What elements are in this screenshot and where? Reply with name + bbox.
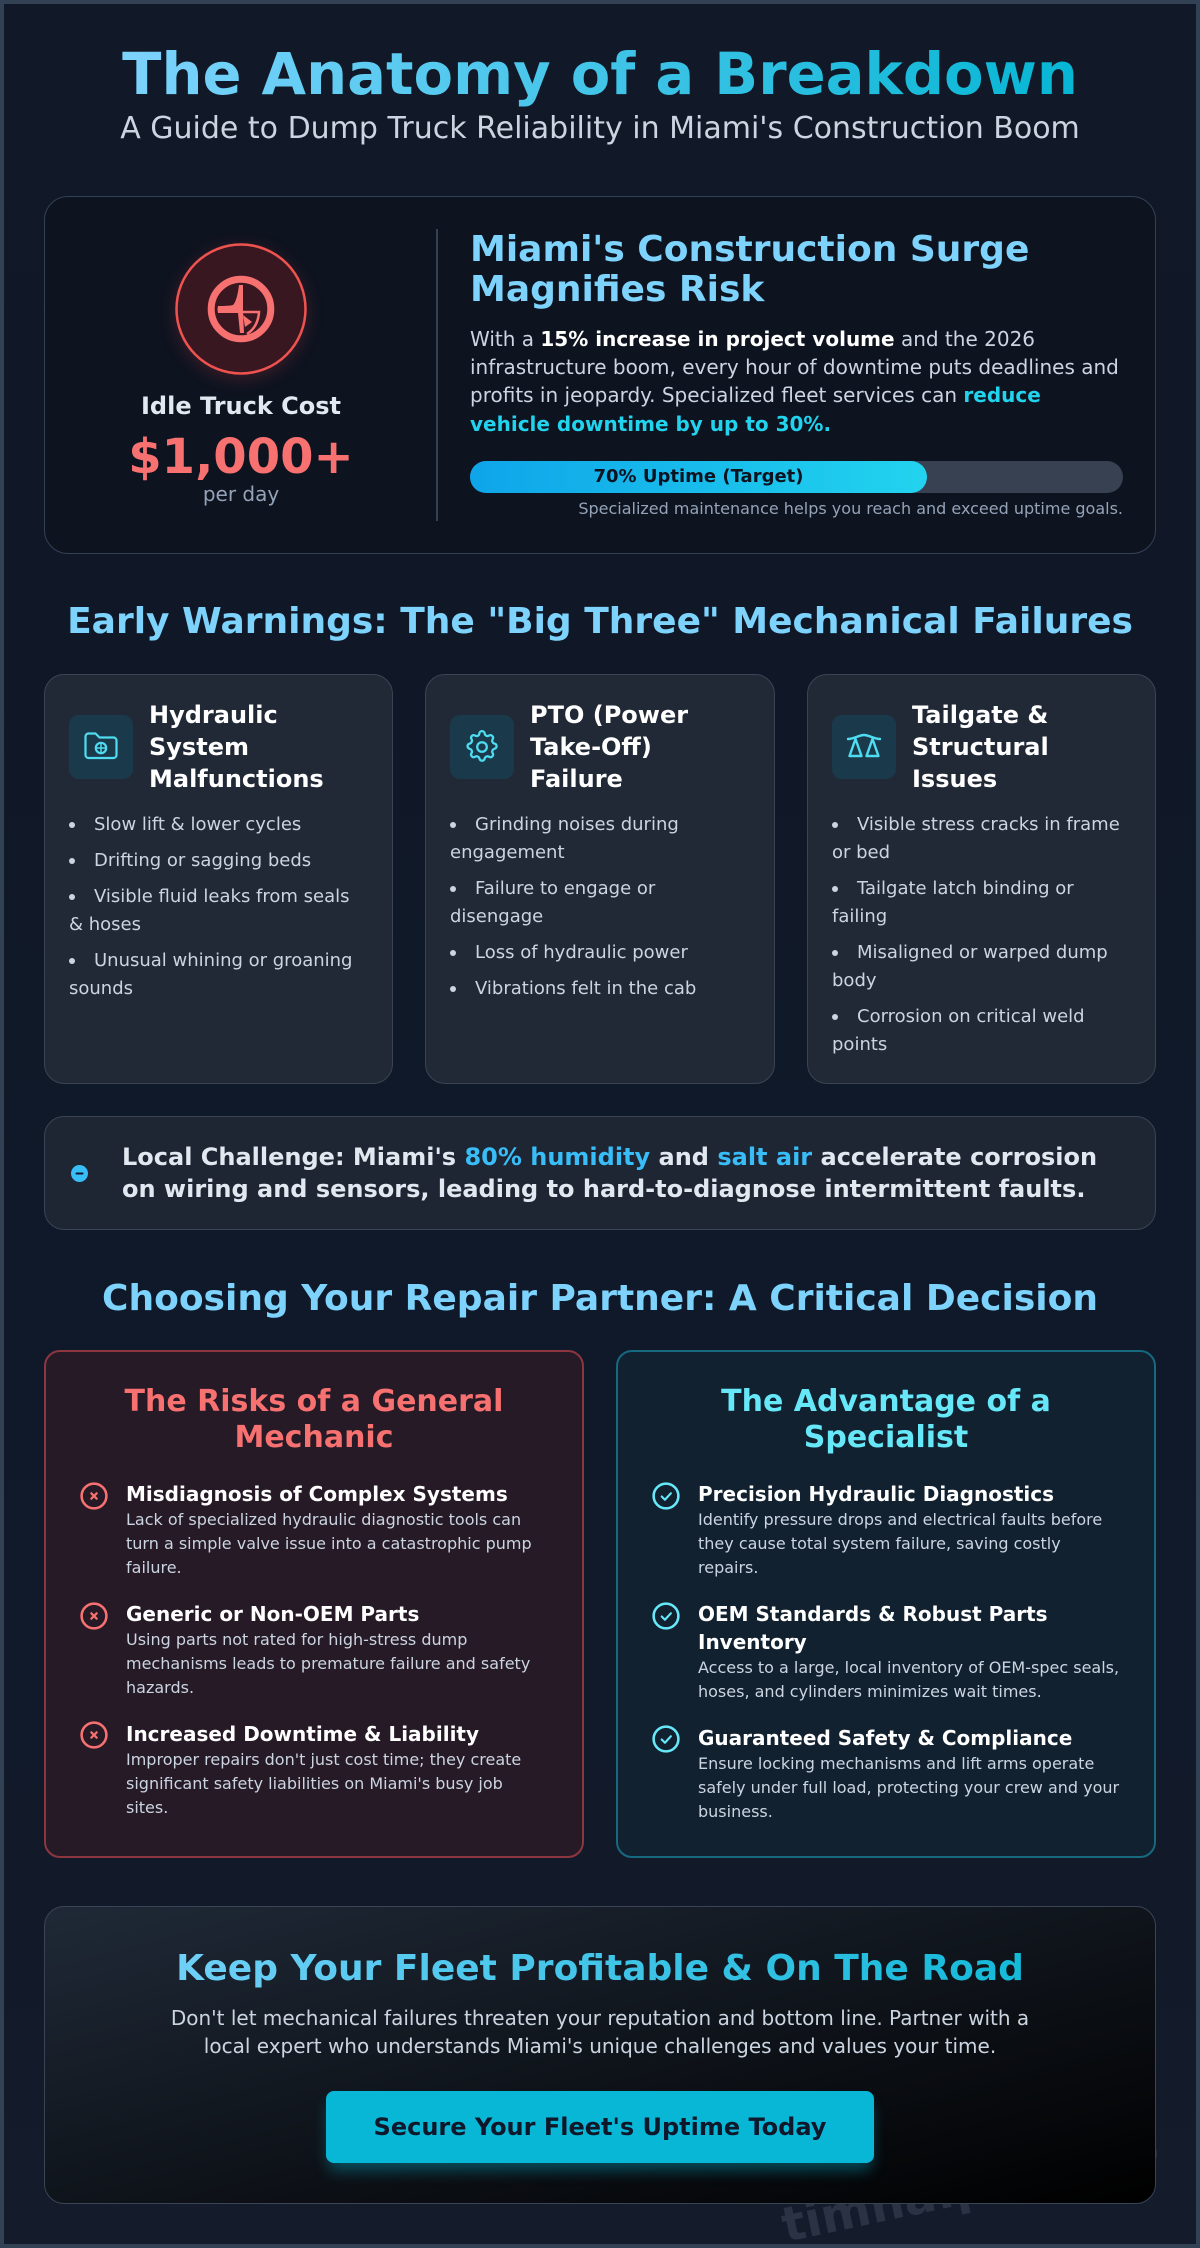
card: hydraulic <box>44 674 393 1084</box>
section heading: early warnings: Early Warnings: The "Big Three" Mechanical Failures <box>67 601 1133 642</box>
CTA button: Secure Your Fleet's Uptime Today <box>374 2113 826 2141</box>
title: The Anatomy of a Breakdown <box>122 41 1078 108</box>
advantage 2 title <box>698 1602 1048 1654</box>
risk 1 title: Misdiagnosis of Complex Systems <box>126 1482 508 1506</box>
risk 2 <box>126 1602 530 1697</box>
advantage 2 text: hoses, and cylinders minimizes wait times. <box>698 1682 1042 1701</box>
advantage 1 text: Identify pressure drops and electrical faults before <box>698 1510 1102 1529</box>
card title <box>530 701 688 793</box>
symptom list <box>450 814 696 999</box>
advantage 3 text: Ensure locking mechanisms and lift arms operate <box>698 1754 1094 1773</box>
advantage 1 text: they cause total system failure, saving costly <box>698 1534 1061 1553</box>
symptom list <box>832 814 1120 1055</box>
advantage 3 title: Guaranteed Safety & Compliance <box>698 1726 1072 1750</box>
advantage 2 <box>698 1602 1119 1701</box>
risk 3 text <box>126 1750 521 1817</box>
card title: Take-Off) <box>530 733 652 761</box>
risk 2 text: Using parts not rated for high-stress dump <box>126 1630 467 1649</box>
card title: Tailgate & <box>912 701 1048 729</box>
risk 1 text: failure. <box>126 1558 182 1577</box>
panel heading: Mechanic <box>234 1420 394 1455</box>
risk 3 text: Improper repairs don't just cost time; they create <box>126 1750 521 1769</box>
card: tailgate <box>807 674 1156 1084</box>
section heading: repair partner: Choosing Your Repair Partner: A Critical Decision <box>102 1278 1098 1319</box>
symptom list: Misaligned or warped dump body <box>832 942 1108 991</box>
panel heading: The Risks of a General <box>125 1384 503 1419</box>
callout text: on wiring and sensors, leading to hard-to-diagnose intermittent faults. <box>122 1175 1085 1203</box>
heading: construction surge: Magnifies Risk <box>470 269 764 310</box>
card title <box>149 701 324 793</box>
symptom list: Tailgate latch binding or failing <box>832 878 1074 927</box>
icon: check circle 2 <box>652 1602 680 1630</box>
CTA heading: Keep Your Fleet Profitable & On The Road <box>176 1948 1024 1989</box>
advantage 3 text: business. <box>698 1802 773 1821</box>
risk 1 text <box>126 1510 532 1577</box>
symptom list: Grinding noises during engagement <box>450 814 679 863</box>
advantage 1 text <box>698 1510 1102 1577</box>
card: PTO <box>425 674 775 1084</box>
panel: general mechanic risks <box>44 1350 584 1858</box>
card title: PTO (Power <box>530 701 688 729</box>
advantage 2 title: OEM Standards & Robust Parts <box>698 1602 1048 1626</box>
card title: Structural <box>912 733 1049 761</box>
icon: red warning dial <box>169 241 313 385</box>
heading: construction surge: Miami's Construction Surge <box>470 229 1029 270</box>
symptom list: Unusual whining or groaning sounds <box>69 950 352 999</box>
advantage 2 text <box>698 1658 1119 1701</box>
CTA text <box>171 2006 1029 2058</box>
panel: call to action <box>44 1906 1156 2204</box>
progress bar: 70% uptime <box>470 461 1123 493</box>
risk 2 title: Generic or Non-OEM Parts <box>126 1602 419 1626</box>
advantage 1 title: Precision Hydraulic Diagnostics <box>698 1482 1054 1506</box>
advantage 2 text: Access to a large, local inventory of OEM-spec seals, <box>698 1658 1119 1677</box>
callout text <box>122 1143 1097 1203</box>
progress fill: 70% Uptime (Target) <box>594 466 804 487</box>
risk 2 text: mechanisms leads to premature failure and safety <box>126 1654 530 1673</box>
divider <box>436 229 438 521</box>
body text: With a 15% increase in project volume and the 2026 <box>470 327 1035 351</box>
risk 3 text: significant safety liabilities on Miami's busy job <box>126 1774 503 1793</box>
icon: check circle 3 <box>652 1725 680 1753</box>
stat: cost per day: $1,000+ <box>128 429 354 485</box>
risk 3 title: Increased Downtime & Liability <box>126 1722 479 1746</box>
advantage 1 <box>698 1482 1102 1577</box>
icon: x circle 1 <box>80 1482 108 1510</box>
CTA heading <box>45 1945 1155 1993</box>
heading: construction surge <box>470 229 1029 310</box>
panel: idle cost and construction surge <box>44 196 1156 554</box>
symptom list: Slow lift & lower cycles <box>94 814 301 835</box>
advantage 3 text <box>698 1754 1120 1821</box>
card title: Failure <box>530 765 623 793</box>
card title: System <box>149 733 249 761</box>
callout: local challenge <box>44 1116 1156 1230</box>
advantage 3 text: safely under full load, protecting your crew and your <box>698 1778 1119 1797</box>
label: idle truck cost: Idle Truck Cost <box>141 392 341 420</box>
symptom list: Visible fluid leaks from seals & hoses <box>69 886 350 935</box>
risk 1 <box>126 1482 532 1577</box>
symptom list: Vibrations felt in the cab <box>475 978 696 999</box>
CTA text: local expert who understands Miami's unique challenges and values your time. <box>204 2034 996 2058</box>
label: per day: per day <box>203 482 279 506</box>
body text: vehicle downtime by up to 30%. <box>470 412 831 436</box>
panel heading: The Advantage of a <box>721 1384 1051 1419</box>
advantage 2 title: Inventory <box>698 1630 807 1654</box>
subtitle: A Guide to Dump Truck Reliability in Miami's Construction Boom <box>120 111 1080 146</box>
progress caption: Specialized maintenance helps you reach and exceed uptime goals. <box>578 499 1123 518</box>
symptom list: Drifting or sagging beds <box>94 850 311 871</box>
icon: gear <box>450 715 514 779</box>
risk 2 text: hazards. <box>126 1678 194 1697</box>
body text <box>470 327 1119 436</box>
panel heading <box>124 1384 503 1455</box>
body text: profits in jeopardy. Specialized fleet services can reduce <box>470 383 1041 407</box>
symptom list: Corrosion on critical weld points <box>832 1006 1085 1055</box>
symptom list <box>69 814 352 999</box>
icon: x circle 2 <box>80 1602 108 1630</box>
panel heading: Specialist <box>804 1420 968 1455</box>
icon: x circle 3 <box>80 1721 108 1749</box>
panel heading <box>721 1384 1051 1455</box>
card title: Hydraulic <box>149 701 278 729</box>
callout text: Local Challenge: Miami's 80% humidity and salt air accelerate corrosion <box>122 1143 1097 1171</box>
panel: specialist advantages <box>616 1350 1156 1858</box>
icon: scales <box>832 715 896 779</box>
advantage 1 text: repairs. <box>698 1558 758 1577</box>
icon: minus circle <box>71 1165 88 1182</box>
CTA button <box>326 2091 874 2163</box>
symptom list: Failure to engage or disengage <box>450 878 655 927</box>
risk 2 text <box>126 1630 530 1697</box>
risk 3 text: sites. <box>126 1798 168 1817</box>
card title <box>912 701 1049 793</box>
risk 1 text: Lack of specialized hydraulic diagnostic tools can <box>126 1510 521 1529</box>
icon: check circle 1 <box>652 1482 680 1510</box>
progress fill <box>470 461 927 493</box>
symptom list: Loss of hydraulic power <box>475 942 688 963</box>
body text: infrastructure boom, every hour of downtime puts deadlines and <box>470 355 1119 379</box>
risk 3 <box>126 1722 521 1817</box>
CTA text: Don't let mechanical failures threaten your reputation and bottom line. Partner with a <box>171 2006 1029 2030</box>
advantage 3 <box>698 1726 1120 1821</box>
symptom list: Visible stress cracks in frame or bed <box>832 814 1120 863</box>
risk 1 text: turn a simple valve issue into a catastrophic pump <box>126 1534 532 1553</box>
icon: folder <box>69 715 133 779</box>
card title: Malfunctions <box>149 765 324 793</box>
card title: Issues <box>912 765 997 793</box>
